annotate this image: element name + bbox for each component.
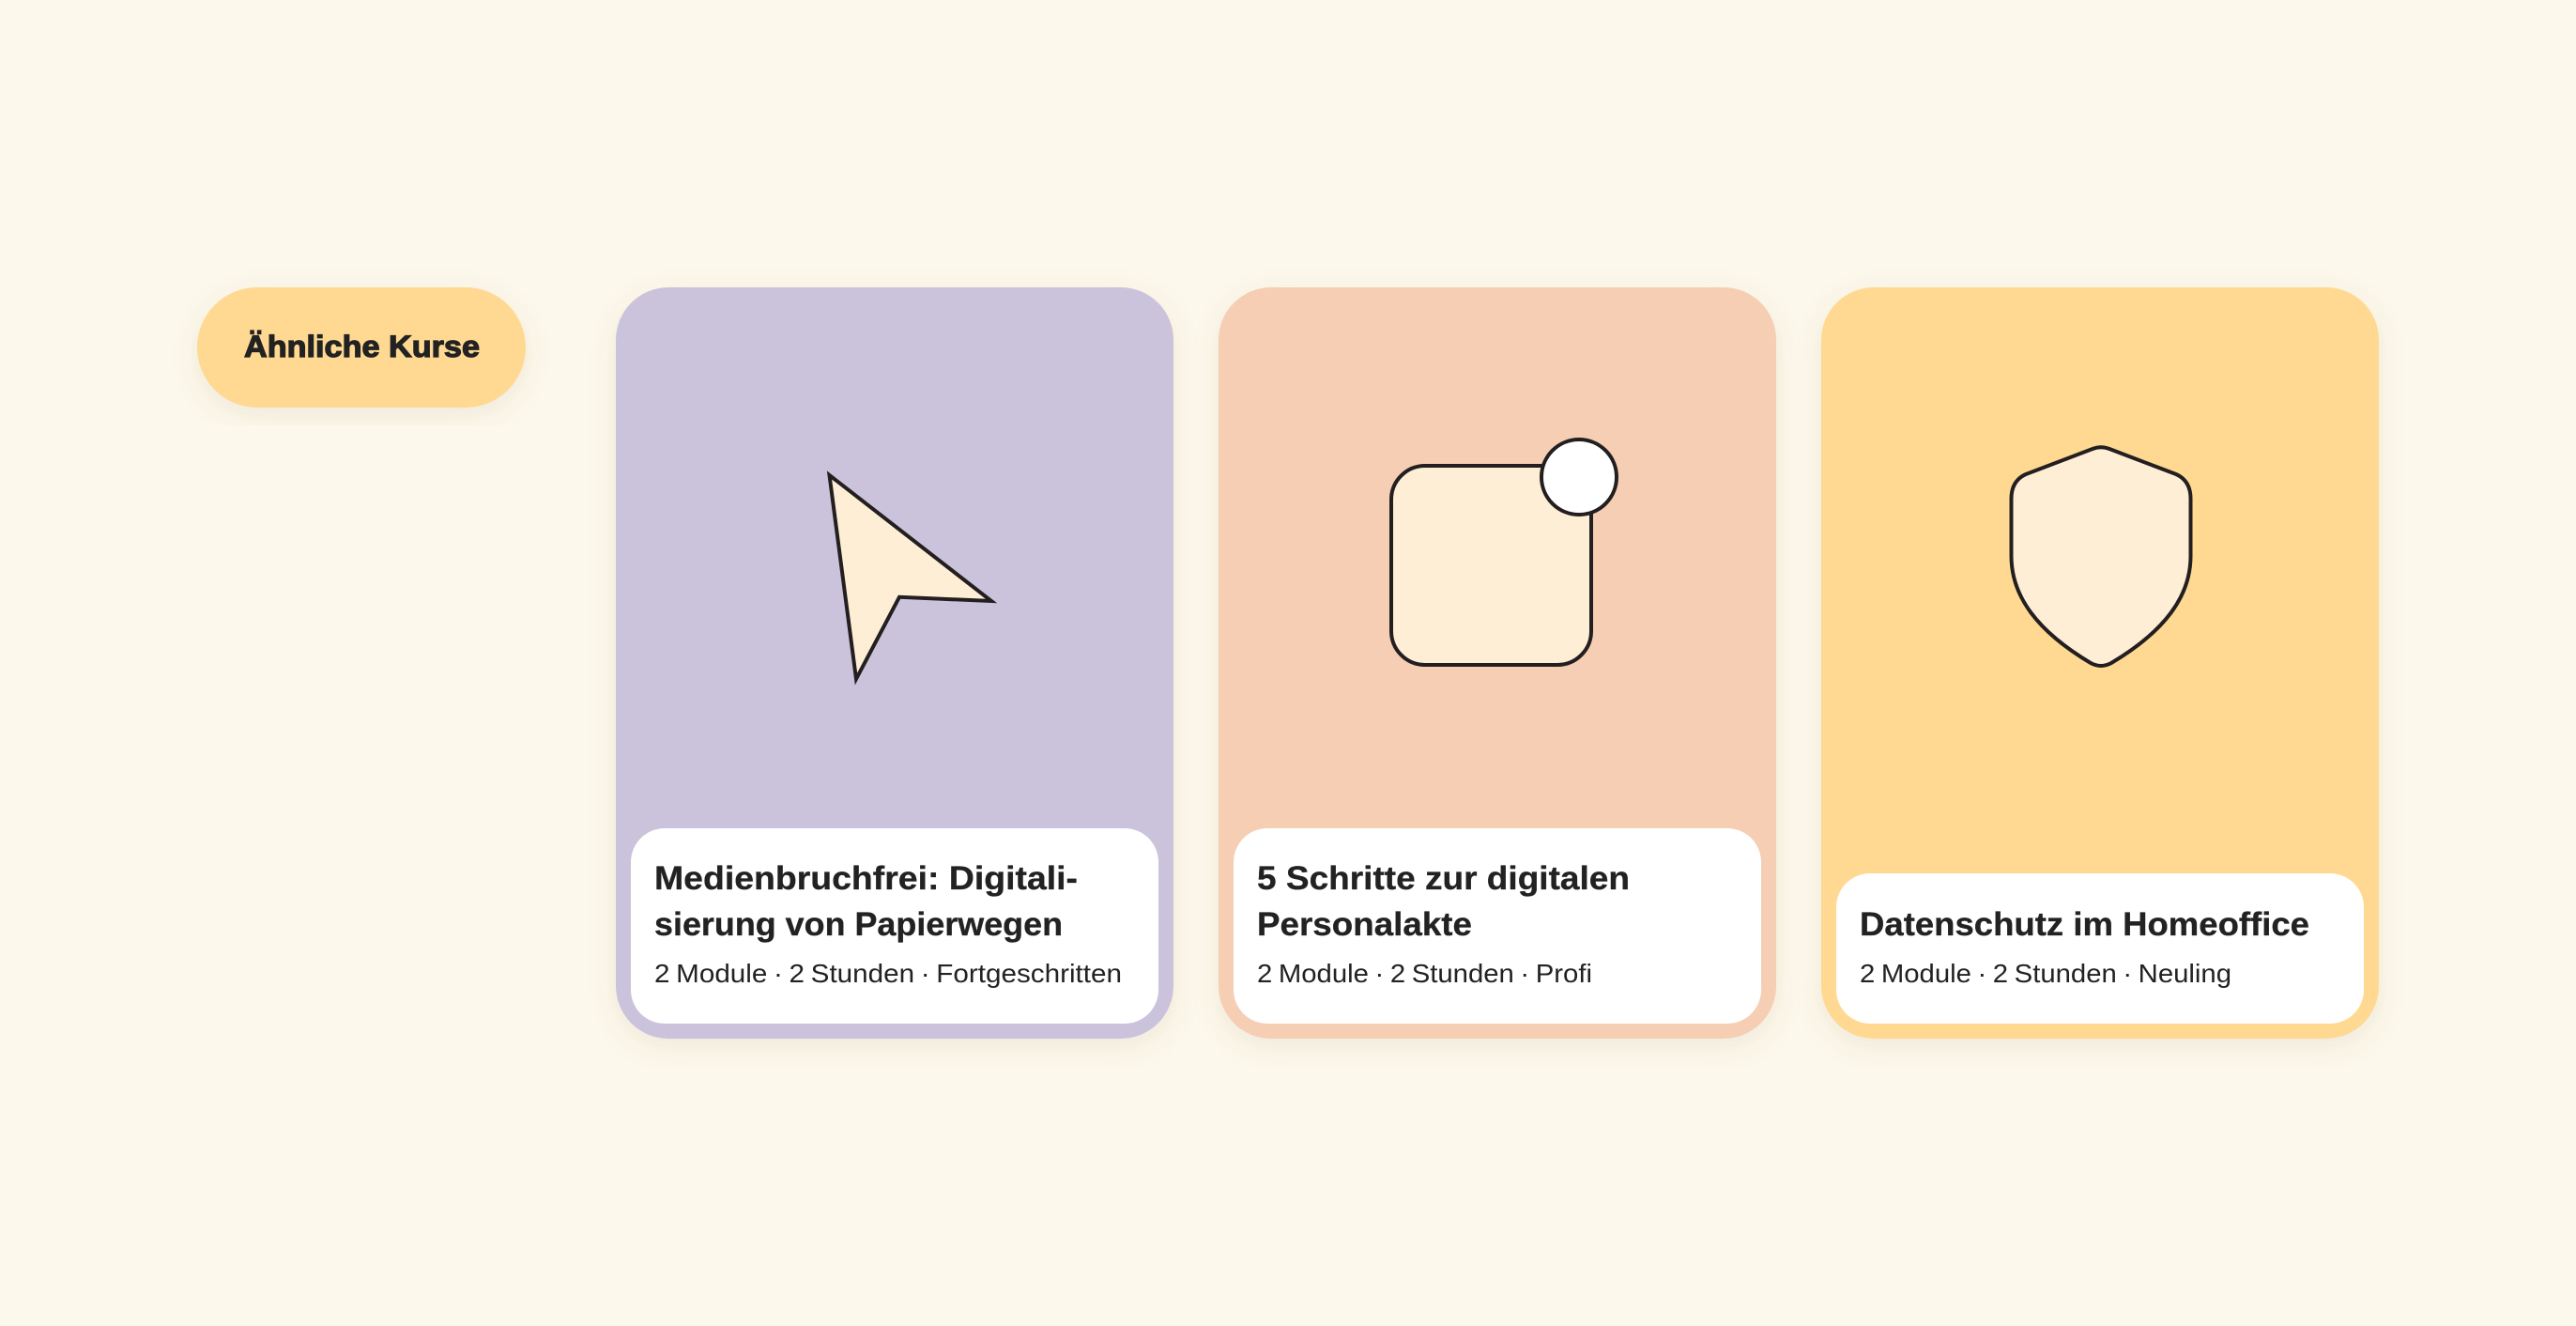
- heading pill: Ähnliche Kurse: Ähnliche Kurse: [244, 330, 480, 363]
- heading pill: Ähnliche Kurse: [197, 287, 526, 408]
- panel: course card Medienbruchfrei: [616, 287, 1173, 1039]
- text panel: Medienbruchfrei: [631, 828, 1158, 1024]
- icon: cursor arrow: [830, 475, 991, 679]
- panel: course card Datenschutz: [1821, 287, 2379, 1039]
- text panel: Medienbruchfrei: 2 Module · 2 Stunden · Fortgeschritten: [654, 959, 1122, 988]
- text panel: Datenschutz: [1836, 873, 2364, 1024]
- text panel: 5 Schritte: [1234, 828, 1761, 1024]
- text panel: 5 Schritte: 5 Schritte zur digitalen: [1257, 860, 1630, 897]
- panel: course card Personalakte: [1219, 287, 1776, 1039]
- text panel: Datenschutz: Datenschutz im Homeoffice: [1860, 906, 2309, 943]
- icon: notification square with badge: [1391, 439, 1617, 665]
- text panel: Datenschutz: 2 Module · 2 Stunden · Neuling: [1860, 959, 2231, 988]
- text panel: 5 Schritte: Personalakte: [1257, 906, 1472, 943]
- text panel: 5 Schritte: 2 Module · 2 Stunden · Profi: [1257, 959, 1592, 988]
- icon: shield: [2011, 447, 2191, 666]
- text panel: Medienbruchfrei: sierung von Papierwegen: [654, 906, 1063, 943]
- text panel: Medienbruchfrei: Medienbruchfrei: Digitali-: [654, 860, 1078, 897]
